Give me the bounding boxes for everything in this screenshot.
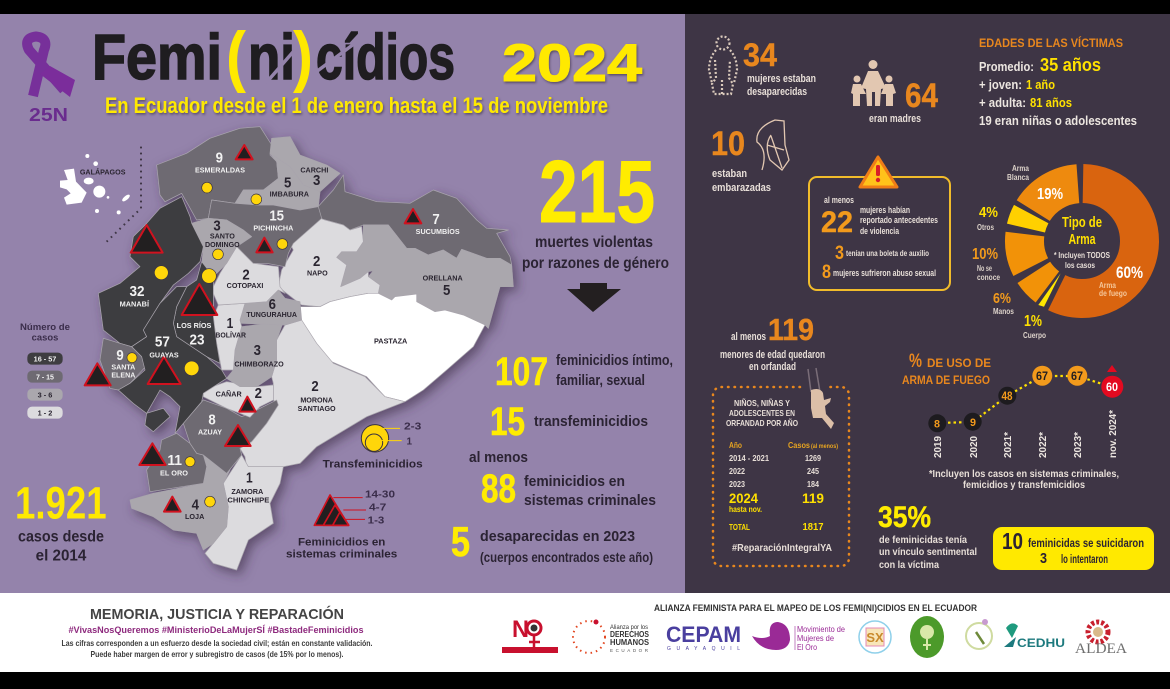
logo: CEDHU bbox=[1004, 623, 1065, 650]
province labels: 2 bbox=[311, 378, 319, 395]
stat: 1.921 cases since 2014: el 2014 bbox=[36, 548, 87, 565]
title: cídios bbox=[316, 21, 455, 93]
province labels: TUNGURAHUA bbox=[246, 312, 297, 319]
stat: 34 missing: 34 bbox=[743, 37, 777, 73]
footer: alliance heading: ALIANZA FEMINISTA PARA EL MAPEO DE LOS FEMI(NI)CIDIOS EN EL ECUADOR bbox=[654, 603, 977, 613]
map of Ecuador bbox=[15, 127, 513, 570]
logo: Movimiento de Mujeres de El Oro bbox=[752, 622, 846, 652]
panel: orphanhood table: (al menos) bbox=[811, 444, 838, 450]
logo: Alianza por los Derechos Humanos: DERECHOS bbox=[610, 630, 650, 639]
panel: orphanhood table: 2022 bbox=[729, 466, 745, 476]
footer: memory, justice and reparation: #VivasNosQueremos #MinisterioDeLaMujerSÍ #BastadeFeminicidios bbox=[68, 625, 364, 636]
province labels: IMBABURA bbox=[270, 192, 309, 199]
panel: orphanhood table: 119 bbox=[802, 490, 824, 506]
footer: memory, justice and reparation: Las cifras corresponden a un esfuerzo desde la sociedad civil; están en constante validación. bbox=[62, 638, 372, 648]
stat: 119 orphaned minors bbox=[720, 312, 825, 373]
province labels: 32 bbox=[129, 283, 144, 300]
province labels: 2 bbox=[313, 253, 320, 270]
stat: 64 mothers: eran madres bbox=[869, 113, 921, 125]
legend: number of cases: 1 - 2 bbox=[38, 410, 52, 417]
province labels: SANTA bbox=[111, 364, 135, 371]
panel: reported violence box bbox=[809, 157, 950, 290]
chart: weapon type donut: Arma bbox=[1068, 231, 1096, 248]
logo: Alianza por los Derechos Humanos: HUMANOS bbox=[610, 638, 650, 647]
legend: number of cases: casos bbox=[32, 333, 58, 343]
panel: reported violence box: mujeres habían bbox=[860, 205, 910, 215]
province labels: PASTAZA bbox=[374, 339, 407, 346]
chart: weapon type donut: 19% bbox=[1037, 186, 1063, 203]
province labels: ORELLANA bbox=[423, 275, 463, 282]
chart: firearm use line: 2021* bbox=[1003, 432, 1014, 458]
province labels: 15 bbox=[269, 208, 284, 225]
panel: orphanhood table: 2014 - 2021 bbox=[729, 453, 769, 463]
legend: criminal system feminicides: 1-3 bbox=[368, 515, 385, 526]
province labels: 4 bbox=[192, 496, 200, 513]
chart: firearm use line: 2019 bbox=[933, 436, 944, 458]
icon: warning triangle bbox=[860, 157, 897, 187]
province labels: 5 bbox=[443, 282, 450, 299]
province labels: CARCHI bbox=[300, 168, 328, 175]
province labels: LOS RÍOS bbox=[177, 321, 212, 330]
stat: 10 pregnant bbox=[711, 125, 771, 194]
panel: orphanhood table: Casos bbox=[788, 441, 811, 450]
chart: weapon type donut: 6% bbox=[993, 290, 1011, 307]
chart: weapon type donut: No se bbox=[977, 263, 992, 273]
footer: memory, justice and reparation: Puede haber margen de error y subregistro de casos (de 15% por lo menos). bbox=[90, 649, 344, 659]
panel: reported violence box: al menos bbox=[824, 195, 854, 205]
province labels: ZAMORA bbox=[231, 489, 263, 496]
province labels: EL ORO bbox=[160, 470, 189, 477]
province labels: 9 bbox=[116, 347, 124, 364]
chart: firearm use line: 60 bbox=[1106, 380, 1118, 394]
panel: ages of victims: 19 eran niñas o adolescentes bbox=[979, 114, 1137, 128]
map provinces bbox=[98, 127, 513, 570]
logo: Alianza por los Derechos Humanos: ECUADOR bbox=[610, 648, 649, 653]
stat: 215 violent deaths: 215 bbox=[539, 142, 655, 241]
legend: number of cases: 16 - 57 bbox=[34, 356, 56, 363]
province labels: PICHINCHA bbox=[253, 226, 293, 233]
stat: 10 pregnant: estaban bbox=[712, 168, 747, 180]
province labels: DOMINGO bbox=[205, 242, 240, 249]
panel: reported violence box: reportado antecedentes bbox=[860, 215, 938, 225]
panel: orphanhood table: 184 bbox=[807, 479, 819, 489]
stat: 35% sentimental bond: de feminicidas tenía bbox=[879, 534, 967, 546]
title: 2024 bbox=[502, 34, 643, 93]
chart: weapon type donut: Blanca bbox=[1007, 172, 1029, 182]
title: ni bbox=[248, 21, 295, 93]
icon: Galapagos islands bbox=[60, 154, 131, 214]
logo: Alianza por los Derechos Humanos bbox=[573, 620, 650, 653]
province labels: CHIMBORAZO bbox=[234, 361, 284, 368]
province labels: 6 bbox=[269, 296, 276, 313]
legend: criminal system feminicides: sistemas criminales bbox=[286, 548, 397, 560]
chart: firearm use line: 2023* bbox=[1073, 432, 1084, 458]
province labels: COTOPAXI bbox=[227, 283, 263, 290]
logo: Alianza por los Derechos Humanos: Alianza por los bbox=[610, 625, 648, 631]
panel: ages of victims bbox=[979, 35, 1137, 128]
panel: orphanhood table: 1817 bbox=[802, 521, 824, 533]
chart: weapon type donut: Arma bbox=[1012, 163, 1029, 173]
stat: 119 orphaned minors: en orfandad bbox=[749, 361, 796, 373]
legend: transfemicides: Transfeminicidios bbox=[323, 459, 423, 471]
panel: orphanhood table: ORFANDAD POR AÑO bbox=[726, 418, 798, 428]
province labels: 3 bbox=[213, 218, 221, 235]
stat: 88: 88 bbox=[481, 467, 516, 511]
stat: 107: 107 bbox=[495, 350, 548, 394]
panel: ages of victims: + joven: bbox=[979, 78, 1022, 92]
stat: 119 orphaned minors: 119 bbox=[768, 312, 814, 347]
legend: number of cases: 7 - 15 bbox=[36, 374, 54, 381]
panel: reported violence box: de violencia bbox=[860, 226, 900, 236]
panel: ages of victims: Promedio: bbox=[979, 59, 1034, 74]
province labels: SUCUMBÍOS bbox=[416, 227, 460, 236]
logo: bird wreath bbox=[966, 619, 992, 649]
title: Femi bbox=[92, 21, 222, 93]
logo: ALDEA: ALDEA bbox=[1075, 641, 1127, 657]
panel: reported violence box: 22 bbox=[821, 206, 853, 239]
legend: criminal system feminicides: 14-30 bbox=[365, 490, 395, 501]
callout: suicides: 3 bbox=[1040, 550, 1047, 567]
legend: criminal system feminicides: 4-7 bbox=[369, 503, 387, 514]
legend: transfemicides: 1 bbox=[407, 437, 413, 448]
logo: SX circle bbox=[859, 621, 891, 653]
stat: 34 missing: desaparecidas bbox=[747, 86, 807, 98]
province labels: LOJA bbox=[185, 514, 204, 521]
panel: reported violence box: mujeres sufrieron abuso sexual bbox=[833, 268, 936, 278]
stat: 35% sentimental bond bbox=[878, 501, 977, 571]
panel: ages of victims: EDADES DE LAS VÍCTIMAS bbox=[979, 35, 1123, 50]
footer: memory, justice and reparation bbox=[62, 605, 372, 659]
icon: child on swing bbox=[808, 368, 834, 429]
chart: weapon type donut: * Incluyen TODOS bbox=[1054, 250, 1110, 260]
stat: 10 pregnant: 10 bbox=[711, 125, 745, 163]
province labels: 7 bbox=[432, 211, 440, 228]
panel: orphanhood table: Año bbox=[729, 441, 742, 450]
panel: orphanhood table: 2024 bbox=[729, 490, 758, 506]
subtitle: En Ecuador desde el 1 de enero hasta el 15 de noviembre bbox=[105, 93, 608, 118]
stat: 215 violent deaths bbox=[522, 142, 669, 272]
stat: 15: transfeminicidios bbox=[534, 413, 648, 430]
chart: weapon type donut: 60% bbox=[1116, 263, 1143, 282]
stat: 35% sentimental bond: 35% bbox=[878, 501, 931, 534]
logo: NO bbox=[502, 616, 558, 653]
province labels: GUAYAS bbox=[149, 353, 179, 360]
legend: criminal system feminicides bbox=[286, 490, 397, 560]
province labels: 5 bbox=[284, 174, 291, 191]
chart: weapon type donut: Otros bbox=[977, 222, 994, 232]
logo: ALDEA bbox=[1075, 622, 1127, 657]
panel: ages of victims: 81 años bbox=[1030, 96, 1072, 110]
panel: orphanhood table: 2023 bbox=[729, 479, 745, 489]
chart: weapon type donut: Cuerpo bbox=[1023, 330, 1046, 340]
logo: CEPAM: GUAYAQUIL bbox=[667, 646, 740, 652]
stat: 88: al menos bbox=[469, 450, 528, 466]
panel: ages of victims: 1 año bbox=[1026, 78, 1055, 92]
chart: firearm use line bbox=[928, 365, 1123, 458]
province labels: NAPO bbox=[307, 271, 328, 278]
chart: weapon type donut: los casos bbox=[1065, 260, 1095, 270]
note: chart footnote bbox=[929, 469, 1119, 491]
panel: reported violence box: tenían una boleta de auxilio bbox=[846, 248, 929, 258]
stat: 119 orphaned minors: menores de edad quedaron bbox=[720, 349, 825, 361]
title: ( bbox=[226, 18, 246, 94]
logo: Movimiento de Mujeres de El Oro: Movimiento de bbox=[797, 625, 846, 634]
province labels: MANABÍ bbox=[120, 300, 150, 309]
title bbox=[92, 18, 643, 94]
province labels: CHINCHIPE bbox=[227, 498, 270, 505]
chart: firearm use line: 8 bbox=[934, 418, 940, 430]
chart: firearm use line: nov. 2024* bbox=[1108, 410, 1119, 458]
stat: 107: familiar, sexual bbox=[556, 372, 645, 389]
stat: 10 pregnant: embarazadas bbox=[712, 182, 771, 194]
icon: family bbox=[851, 60, 896, 106]
callout: suicides bbox=[993, 527, 1154, 570]
heading: firearm use: ARMA DE FUEGO bbox=[902, 373, 990, 387]
panel: ages of victims: + adulta: bbox=[979, 96, 1026, 110]
stat: 107: feminicidios íntimo, bbox=[556, 352, 673, 369]
panel: right dark background bbox=[685, 14, 1170, 593]
stat: 88 bbox=[469, 450, 656, 511]
stat: 34 missing bbox=[743, 37, 816, 98]
province labels: 11 bbox=[167, 452, 182, 469]
stat: 34 missing: mujeres estaban bbox=[747, 73, 816, 85]
stat: 88: sistemas criminales bbox=[524, 492, 656, 509]
province labels: 3 bbox=[254, 342, 261, 359]
stat: 5: desaparecidas en 2023 bbox=[480, 528, 635, 545]
legend: number of cases bbox=[20, 322, 70, 419]
chart: weapon type donut: conoce bbox=[977, 272, 1000, 282]
panel: white footer bbox=[0, 593, 1170, 672]
stat: 15 bbox=[490, 400, 648, 444]
stat: 107 bbox=[495, 350, 673, 394]
panel: ages of victims: 35 años bbox=[1040, 55, 1101, 75]
chart: firearm use line: 9 bbox=[970, 417, 976, 429]
chart: weapon type donut: Manos bbox=[993, 306, 1014, 316]
heading: firearm use: % bbox=[909, 351, 922, 372]
chart: weapon type donut: Arma bbox=[1099, 280, 1116, 290]
title: ) bbox=[293, 18, 313, 94]
chart: weapon type donut bbox=[972, 160, 1163, 340]
logo: NO: N bbox=[512, 616, 529, 643]
callout: suicides: lo intentaron bbox=[1061, 552, 1108, 566]
icons: criminal systems triangles bbox=[85, 145, 421, 512]
panel: reported violence box: 3 bbox=[835, 243, 844, 264]
icon: pregnant woman bbox=[757, 120, 789, 170]
legend: criminal system feminicides: Feminicidios en bbox=[298, 537, 386, 549]
panel: orphanhood table: TOTAL bbox=[729, 522, 750, 532]
province labels: 3 bbox=[313, 172, 320, 189]
province labels: 9 bbox=[216, 149, 223, 166]
stat: 35% sentimental bond: con la víctima bbox=[879, 559, 939, 571]
stat: 215 violent deaths: muertes violentas bbox=[535, 234, 653, 251]
legend: transfemicides: 2-3 bbox=[404, 421, 422, 432]
note: chart footnote: *Incluyen los casos en sistemas criminales, bbox=[929, 469, 1119, 480]
stat: 5: (cuerpos encontrados este año) bbox=[480, 550, 653, 565]
chart: firearm use line: 48 bbox=[1002, 391, 1013, 403]
panel: orphanhood table bbox=[713, 387, 849, 566]
legend: transfemicides bbox=[323, 421, 423, 471]
logo: green circle bbox=[910, 616, 944, 658]
arrow: down bbox=[567, 283, 621, 312]
province labels: 1 bbox=[227, 315, 233, 332]
footer: memory, justice and reparation: MEMORIA, JUSTICIA Y REPARACIÓN bbox=[90, 605, 344, 623]
stat: 64 mothers bbox=[869, 77, 938, 125]
callout: suicides: 10 bbox=[1002, 528, 1023, 554]
Galapagos label: GALÁPAGOS bbox=[80, 167, 126, 176]
stat: 5 bbox=[451, 518, 653, 565]
legend: number of cases: 3 - 6 bbox=[38, 392, 52, 399]
icons: transfemicide dots bbox=[127, 182, 288, 507]
stat: 1.921 cases since 2014 bbox=[15, 477, 107, 565]
icon: purple ribbon 25N: 25N bbox=[29, 105, 68, 125]
stat: 215 violent deaths: por razones de género bbox=[522, 255, 669, 272]
legend: number of cases: Número de bbox=[20, 322, 70, 332]
logo: CEDHU: CEDHU bbox=[1017, 636, 1065, 650]
panel: orphanhood table: ADOLESCENTES EN bbox=[729, 408, 795, 418]
province labels: 57 bbox=[155, 334, 170, 351]
panel: orphanhood table: #ReparaciónIntegralYA bbox=[732, 542, 832, 554]
logo: Movimiento de Mujeres de El Oro: El Oro bbox=[797, 643, 817, 652]
panel: orphanhood table: hasta nov. bbox=[729, 505, 762, 514]
province labels: 2 bbox=[255, 385, 262, 402]
province labels bbox=[111, 149, 463, 521]
heading: firearm use: DE USO DE bbox=[927, 356, 991, 370]
province labels: AZUAY bbox=[198, 429, 222, 436]
heading: firearm use bbox=[902, 351, 991, 387]
panel: reported violence box: 8 bbox=[822, 262, 831, 283]
province labels: ESMERALDAS bbox=[195, 167, 245, 174]
province labels: CAÑAR bbox=[216, 390, 242, 399]
province labels: MORONA bbox=[300, 398, 333, 405]
chart: firearm use line: 2022* bbox=[1038, 432, 1049, 458]
stat: 5: 5 bbox=[451, 518, 470, 565]
chart: weapon type donut: 10% bbox=[972, 246, 998, 263]
stat: 1.921 cases since 2014: casos desde bbox=[18, 529, 104, 546]
chart: weapon type donut: Tipo de bbox=[1062, 214, 1102, 231]
stat: 88: feminicidios en bbox=[524, 473, 625, 490]
logo: SX circle: SX bbox=[866, 630, 884, 645]
note: chart footnote: femicidios y transfemicidios bbox=[963, 480, 1085, 491]
chart: firearm use line: 67 bbox=[1036, 369, 1048, 383]
province labels: SANTO bbox=[210, 234, 235, 241]
province labels: ELENA bbox=[111, 373, 135, 380]
chart: firearm use line: 2020 bbox=[969, 436, 980, 458]
panel: left purple background bbox=[0, 14, 685, 593]
chart: weapon type donut: 1% bbox=[1024, 313, 1042, 330]
icon: dotted woman bbox=[709, 36, 737, 94]
stat: 15: 15 bbox=[490, 400, 525, 444]
panel: orphanhood table: 245 bbox=[807, 466, 819, 476]
logo: Movimiento de Mujeres de El Oro: Mujeres de bbox=[797, 634, 835, 643]
province labels: BOLÍVAR bbox=[215, 330, 246, 339]
logo: CEPAM: CEPAM bbox=[666, 622, 741, 647]
province labels: 1 bbox=[246, 470, 253, 487]
chart: weapon type donut: 4% bbox=[979, 204, 998, 221]
icon: purple ribbon 25N bbox=[27, 36, 75, 125]
panel: orphanhood table: NIÑOS, NIÑAS Y bbox=[734, 398, 790, 408]
stat: 35% sentimental bond: un vínculo sentimental bbox=[879, 546, 977, 558]
stat: 64 mothers: 64 bbox=[905, 77, 938, 115]
province labels: SANTIAGO bbox=[298, 406, 336, 413]
chart: firearm use line: 67 bbox=[1071, 369, 1083, 383]
stat: 1.921 cases since 2014: 1.921 bbox=[15, 477, 107, 528]
chart: weapon type donut: de fuego bbox=[1099, 288, 1127, 298]
province labels: 2 bbox=[242, 266, 250, 283]
province labels: 8 bbox=[208, 411, 216, 428]
panel: orphanhood table: 1269 bbox=[805, 453, 821, 463]
province labels: 23 bbox=[189, 331, 204, 348]
stat: 119 orphaned minors: al menos bbox=[731, 331, 766, 343]
